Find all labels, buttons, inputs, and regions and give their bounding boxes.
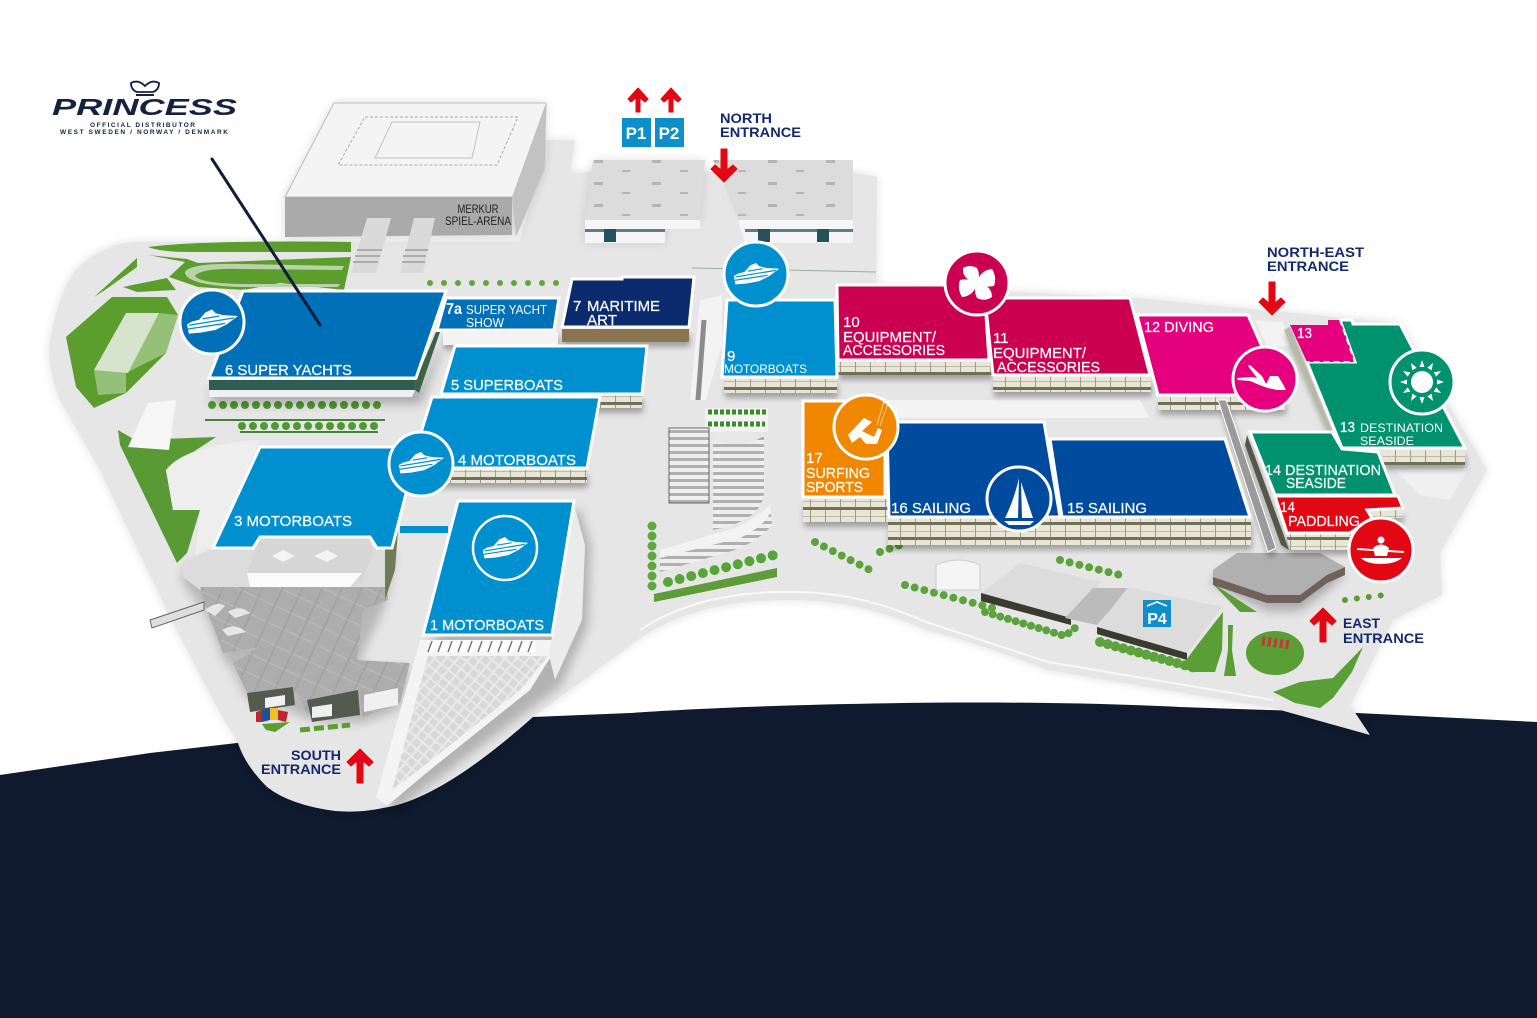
hall 14 destination seaside and paddling: PADDLING <box>1288 513 1360 530</box>
icon: sailboat circle <box>987 467 1051 531</box>
icon: kayak circle <box>1349 518 1413 582</box>
hall 14 destination seaside and paddling: 14 DESTINATION <box>1265 462 1381 479</box>
hall 7 maritime art <box>562 277 694 329</box>
hall 13 destination seaside: DESTINATION <box>1360 421 1443 435</box>
hall 7a super yacht show: 7a <box>446 301 462 318</box>
east entrance hall and gardens <box>1180 468 1468 708</box>
hall 15 sailing <box>1050 439 1250 517</box>
icon: motorboat circle hall 9 <box>724 242 788 306</box>
logo crown <box>131 82 159 95</box>
hall 12 diving <box>1137 315 1270 395</box>
north entrance label <box>720 110 801 140</box>
south entrance label: ENTRANCE <box>261 761 341 777</box>
hall 7a super yacht show <box>437 298 559 330</box>
hall 3 motorboats: 3 MOTORBOATS <box>234 513 352 530</box>
hall 11 equipment <box>985 298 1150 376</box>
hall 9 motorboats: 9 <box>727 348 735 365</box>
arena name line 2: SPIEL-ARENA <box>445 216 511 228</box>
hall 7 maritime art: ART <box>587 312 617 329</box>
icon: kite surfer circle <box>834 395 898 459</box>
hall 7a super yacht show: SUPER YACHT <box>466 302 547 317</box>
hall 10 equipment: 10 <box>843 314 860 331</box>
arrow: P1 up <box>628 88 648 112</box>
hall 9 motorboats <box>722 300 837 377</box>
hall 13 destination seaside: 13 <box>1340 419 1355 436</box>
hall 1 motorboats <box>423 501 574 635</box>
arrow: north entrance <box>711 149 737 182</box>
P4 sign text: P4 <box>1147 611 1167 628</box>
north entrance label: ENTRANCE <box>720 124 801 140</box>
arena name: MERKUR <box>458 204 498 216</box>
hall 16 sailing: 16 SAILING <box>891 500 971 517</box>
hall 9 motorboats: MOTORBOATS <box>724 362 807 376</box>
south entrance label: SOUTH <box>291 747 341 763</box>
west green park <box>66 242 351 408</box>
hall 10 equipment: EQUIPMENT/ <box>843 329 937 346</box>
north-east entrance label: ENTRANCE <box>1267 258 1349 274</box>
west plaza and trees <box>118 283 560 563</box>
icon: diver circle <box>1233 347 1297 411</box>
hall 14 destination seaside and paddling: SEASIDE <box>1286 475 1346 492</box>
icon: motorboat outline circle <box>473 516 537 580</box>
south entrance label <box>261 747 341 777</box>
east entrance label: ENTRANCE <box>1343 630 1424 646</box>
parking sign P2 <box>655 118 684 147</box>
icon: super yacht circle <box>180 290 244 354</box>
hall 6 super yachts <box>209 291 446 379</box>
arena building <box>285 103 546 273</box>
hall 13 destination seaside: SEASIDE <box>1360 434 1414 448</box>
arrow: south entrance <box>347 749 373 783</box>
parking sign P1 <box>622 118 651 147</box>
north-east entrance label: NORTH-EAST <box>1267 244 1364 260</box>
hall 17 surfing sports: SURFING <box>806 465 870 482</box>
hall 7a super yacht show: SHOW <box>466 315 505 330</box>
parking sign P1: P1 <box>626 124 646 143</box>
hall 11 equipment: 11 <box>993 330 1009 347</box>
hall 10 equipment: ACCESSORIES <box>843 342 945 359</box>
navy band <box>0 703 1537 1018</box>
hall 3 motorboats <box>213 447 418 548</box>
Princess logo: OFFICIAL DISTRIBUTOR <box>90 122 195 129</box>
central tower building <box>652 295 777 602</box>
east entrance label <box>1343 615 1424 646</box>
hall 10 equipment <box>837 285 989 360</box>
venue ground <box>49 140 1487 812</box>
Princess logo: PRINCESS <box>52 94 238 120</box>
hall 5 superboats: 5 SUPERBOATS <box>451 377 563 394</box>
north halls grey <box>585 160 876 272</box>
icon: sun circle <box>1390 350 1454 414</box>
Princess logo <box>52 82 238 136</box>
hall 6 facade <box>209 332 441 404</box>
hall 7 maritime art: MARITIME <box>587 298 660 315</box>
hall 7 maritime art: 7 <box>573 298 581 315</box>
hall 13 destination seaside <box>1290 320 1465 448</box>
connector between halls 3 and 1 <box>400 526 448 533</box>
hall 15 sailing: 15 SAILING <box>1067 500 1147 517</box>
south entrance hall complex <box>150 505 410 732</box>
hall 14 destination seaside and paddling <box>1250 432 1403 533</box>
hall 16 sailing <box>887 422 1060 517</box>
hall 13 destination seaside: 13 <box>1297 325 1312 342</box>
hall 4 motorboats: 4 MOTORBOATS <box>458 452 576 469</box>
hall 4 motorboats <box>410 397 600 469</box>
hall 14 destination seaside and paddling: 14 <box>1280 499 1295 516</box>
parking sign P2: P2 <box>659 124 679 143</box>
arrow: north-east entrance <box>1259 282 1285 315</box>
icon: propeller circle <box>945 251 1009 315</box>
hall 17 surfing sports: SPORTS <box>806 479 863 496</box>
pointer line to hall 6 <box>212 159 320 325</box>
arrow: east entrance <box>1310 608 1336 642</box>
hall 17 surfing sports <box>803 401 885 497</box>
hall 6 super yachts: 6 SUPER YACHTS <box>225 362 352 379</box>
north-east entrance label <box>1267 244 1364 274</box>
other hall facades <box>410 327 1465 552</box>
hall 5 superboats <box>441 346 647 394</box>
hall 12 diving: 12 DIVING <box>1144 319 1214 336</box>
hall 1 motorboats: 1 MOTORBOATS <box>430 617 544 634</box>
hall 1 seating wedge <box>376 501 591 812</box>
north entrance label: NORTH <box>720 110 772 126</box>
arrow: P2 up <box>661 88 681 112</box>
Princess logo: WEST SWEDEN / NORWAY / DENMARK <box>60 129 228 136</box>
east entrance label: EAST <box>1343 615 1380 631</box>
icon: motorboat circle hall 4 <box>389 432 453 496</box>
south-central parking and trees <box>815 542 1222 668</box>
hall 17 surfing sports: 17 <box>806 450 823 467</box>
hall 11 equipment: EQUIPMENT/ <box>993 345 1087 362</box>
hall 11 equipment: ACCESSORIES <box>997 359 1100 376</box>
